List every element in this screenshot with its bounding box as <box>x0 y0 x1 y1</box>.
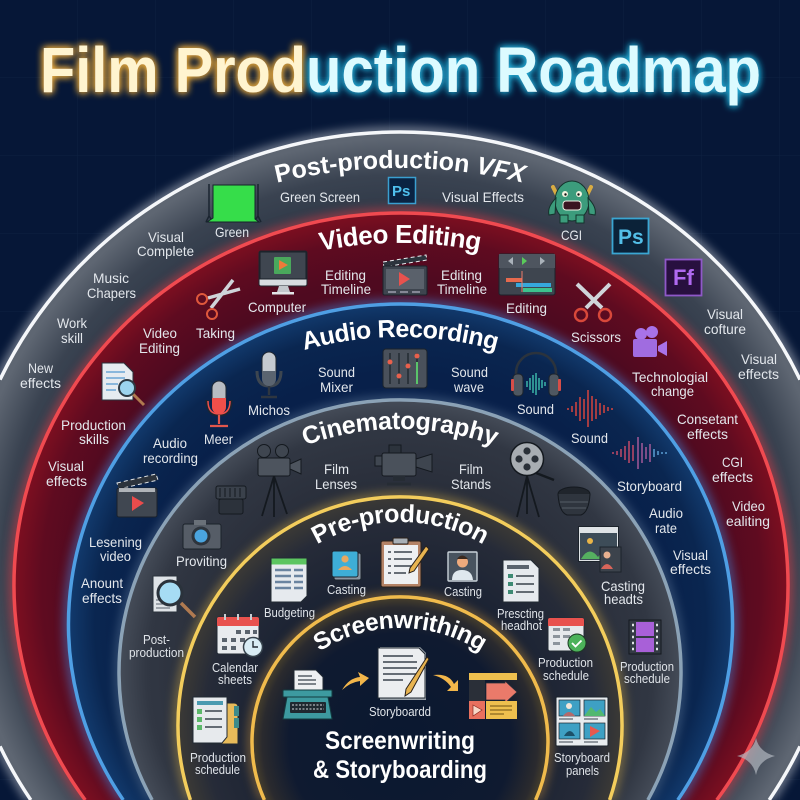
icon: lens right <box>558 487 590 515</box>
labels: pre-production ring: Calendar <box>212 661 258 675</box>
labels: audio recording ring: effects <box>82 590 122 606</box>
icon: headshot portrait <box>448 552 477 581</box>
heading: Cinematography: Cinematography <box>302 412 499 448</box>
icon: red sound wave <box>568 390 612 427</box>
labels: video editing ring: effects <box>712 469 753 485</box>
labels: video editing ring: Scissors <box>571 329 621 345</box>
heading: Screenwrithing: Screenwrithing <box>314 612 486 654</box>
labels: pre-production ring <box>190 583 610 778</box>
icon: CGI monster <box>549 181 595 223</box>
arrow: typewriter to script <box>342 672 369 690</box>
icon: Ps small <box>388 178 416 204</box>
labels: post-production ring: Work <box>57 315 88 331</box>
icon: sparkle mark <box>737 738 775 775</box>
icon: film camera on tripod <box>258 444 301 517</box>
icon: film reel on tripod <box>510 442 554 517</box>
heading: Video Editing: Video Editing <box>318 224 480 255</box>
labels: video editing ring: Consetant <box>677 411 738 427</box>
arrow: script to storyboard <box>433 675 458 691</box>
labels: pre-production ring: Prescting <box>497 607 544 621</box>
labels: audio recording ring <box>81 364 711 606</box>
icon: headphones <box>511 353 561 396</box>
labels: video editing ring: Timeline <box>321 281 371 297</box>
icon: clipboard with pencil <box>381 538 429 587</box>
labels: video editing ring: Editing <box>139 340 180 356</box>
labels: post-production ring: Visual <box>741 351 777 367</box>
icon: sound mixer <box>383 349 427 388</box>
labels: pre-production ring: sheets <box>218 673 252 687</box>
title: uction Roadmap <box>306 34 761 106</box>
labels: cinematography ring: Casting <box>601 578 645 594</box>
panel: audio recording ring <box>68 304 732 800</box>
labels: audio recording ring: Mixer <box>320 379 353 395</box>
labels: audio recording ring: Storyboard <box>617 478 682 494</box>
icon: photo window with headshot <box>578 526 621 572</box>
labels: video editing ring: change <box>651 383 694 399</box>
icon: calendar with check <box>548 618 586 652</box>
labels: post-production ring: CGI <box>561 227 582 243</box>
labels: audio recording ring: Audio <box>649 505 683 521</box>
heading: Post-production VFX: Post-production VFX <box>274 150 528 182</box>
labels: audio recording ring: recording <box>143 450 198 466</box>
labels: video editing ring: Video <box>732 498 765 514</box>
labels: pre-production ring: Production <box>190 751 246 765</box>
icon: red microphone <box>207 381 231 426</box>
icon: storyboard sound wave <box>613 437 666 469</box>
labels: post-production ring: skill <box>61 330 83 346</box>
labels: cinematography ring <box>129 461 674 686</box>
icon: Ps large: Ps <box>618 226 644 249</box>
labels: audio recording ring: wave <box>453 379 484 395</box>
labels: video editing ring: skills <box>79 431 109 447</box>
labels: cinematography ring: Proviting <box>176 553 227 569</box>
icon: Ps small: Ps <box>392 183 410 200</box>
labels: cinematography ring: Post- <box>143 633 170 647</box>
labels: audio recording ring: Anount <box>81 575 123 591</box>
labels: audio recording ring: Sound <box>517 401 554 417</box>
icon: storyboard blocks <box>469 673 517 719</box>
labels: post-production ring: Green <box>215 224 249 240</box>
title <box>40 34 761 106</box>
labels: pre-production ring: schedule <box>195 763 240 777</box>
icon: scissors orange <box>197 280 240 319</box>
title: Film Prod <box>40 34 306 106</box>
labels: video editing ring: Video <box>143 325 177 341</box>
icon: green screen <box>206 184 261 222</box>
labels: audio recording ring: Audio <box>153 435 187 451</box>
heading: Pre-production: Pre-production <box>310 504 487 544</box>
labels: video editing ring <box>46 267 770 529</box>
icon: clapperboard center <box>383 255 427 295</box>
labels: video editing ring: Production <box>61 417 126 433</box>
labels: audio recording ring: Michos <box>248 402 290 418</box>
labels: video editing ring: Computer <box>248 299 306 315</box>
icon: script with pencil <box>378 647 429 700</box>
labels: post-production ring: Chapers <box>87 285 136 301</box>
panel: video editing ring <box>14 213 788 800</box>
panel: cinematography ring <box>119 400 681 800</box>
labels: audio recording ring: video <box>100 548 131 564</box>
icon: silver microphone <box>257 352 281 397</box>
heading: Screenwriting and Storyboarding: & Storyboarding <box>313 756 487 784</box>
labels: video editing ring: Taking <box>196 325 235 341</box>
labels: audio recording ring: Lesening <box>89 534 142 550</box>
labels: post-production ring: Complete <box>137 243 194 259</box>
labels: video editing ring: CGI <box>722 454 743 470</box>
labels: post-production ring: cofture <box>704 321 746 337</box>
labels: video editing ring: effects <box>687 426 728 442</box>
icon: computer <box>259 251 307 294</box>
labels: cinematography ring: Lenses <box>315 476 357 492</box>
labels: video editing ring: Visual <box>48 458 84 474</box>
icon: calendar with clock <box>217 614 262 656</box>
labels: cinematography ring: Production <box>620 660 674 674</box>
icon: typewriter <box>283 670 332 719</box>
labels: post-production ring: Visual Effects <box>442 189 524 205</box>
labels: post-production ring: Green Screen <box>280 189 360 205</box>
icon: photo camera <box>183 520 221 549</box>
labels: post-production ring: New <box>28 360 54 376</box>
labels: cinematography ring: Film <box>459 461 483 477</box>
heading: Screenwriting and Storyboarding <box>313 727 487 784</box>
icon: clapperboard left <box>117 474 158 517</box>
labels: pre-production ring: headhot <box>501 619 542 633</box>
labels: video editing ring: Timeline <box>437 281 487 297</box>
icon: document with magnifier (production skills) <box>102 363 144 405</box>
labels: pre-production ring: schedule <box>543 669 589 683</box>
panel: pre-production ring <box>178 497 622 800</box>
icon: Ff: Ff <box>673 265 694 290</box>
icon: prescting headshot document <box>503 560 539 602</box>
labels: video editing ring: Editing <box>506 300 547 316</box>
panel: screenwriting ring <box>252 597 548 800</box>
labels: cinematography ring: production <box>129 646 184 660</box>
labels: cinematography ring: schedule <box>624 672 670 686</box>
labels: video editing ring: Editing <box>441 267 482 283</box>
labels: video editing ring: effects <box>46 473 87 489</box>
labels: cinematography ring: headts <box>604 591 643 607</box>
heading: Audio Recording: Audio Recording <box>304 320 498 354</box>
labels: audio recording ring: Meer <box>204 431 233 447</box>
labels: audio recording ring: Visual <box>673 547 708 563</box>
labels: video editing ring: ealiting <box>726 513 770 529</box>
icon: purple film strip <box>629 620 661 654</box>
labels: post-production ring <box>20 189 779 391</box>
labels: post-production ring: Music <box>93 270 129 286</box>
labels: audio recording ring: Sound <box>318 364 355 380</box>
labels: pre-production ring: Casting <box>444 585 482 599</box>
label: Storyboardd: Storyboardd <box>369 705 431 719</box>
labels: pre-production ring: panels <box>566 764 599 778</box>
labels: video editing ring: Editing <box>325 267 366 283</box>
labels: post-production ring: Visual <box>148 229 184 245</box>
icon: magnifier over document <box>153 576 195 617</box>
labels: post-production ring: effects <box>20 375 61 391</box>
labels: pre-production ring: Production <box>538 656 593 670</box>
icon: casting book <box>332 551 361 580</box>
icon: lens left <box>216 486 246 514</box>
labels: post-production ring: Visual <box>707 306 743 322</box>
icon: Ps large <box>612 218 648 254</box>
labels: post-production ring: effects <box>738 366 779 382</box>
icon: storyboard panels <box>556 697 608 746</box>
labels: cinematography ring: Film <box>324 461 349 477</box>
icon: scissors red <box>575 284 611 321</box>
labels: audio recording ring: Sound <box>451 364 488 380</box>
labels: pre-production ring: Budgeting <box>264 606 315 620</box>
labels: cinematography ring: Stands <box>451 476 491 492</box>
labels: audio recording ring: effects <box>670 561 711 577</box>
icon: production schedule document <box>193 697 239 744</box>
labels: pre-production ring: Storyboard <box>554 751 610 765</box>
icon: timeline editor <box>499 254 555 295</box>
icon: Ff <box>666 260 702 296</box>
labels: video editing ring: Technologial <box>632 369 708 385</box>
labels: audio recording ring: rate <box>655 520 677 536</box>
icon: video camera center <box>375 445 432 484</box>
icon: budget spreadsheet <box>271 558 307 602</box>
heading: Screenwriting and Storyboarding: Screenwriting <box>325 727 475 755</box>
labels: pre-production ring: Casting <box>327 583 366 597</box>
labels: audio recording ring: Sound <box>571 430 608 446</box>
icon: purple video camera <box>633 326 667 357</box>
